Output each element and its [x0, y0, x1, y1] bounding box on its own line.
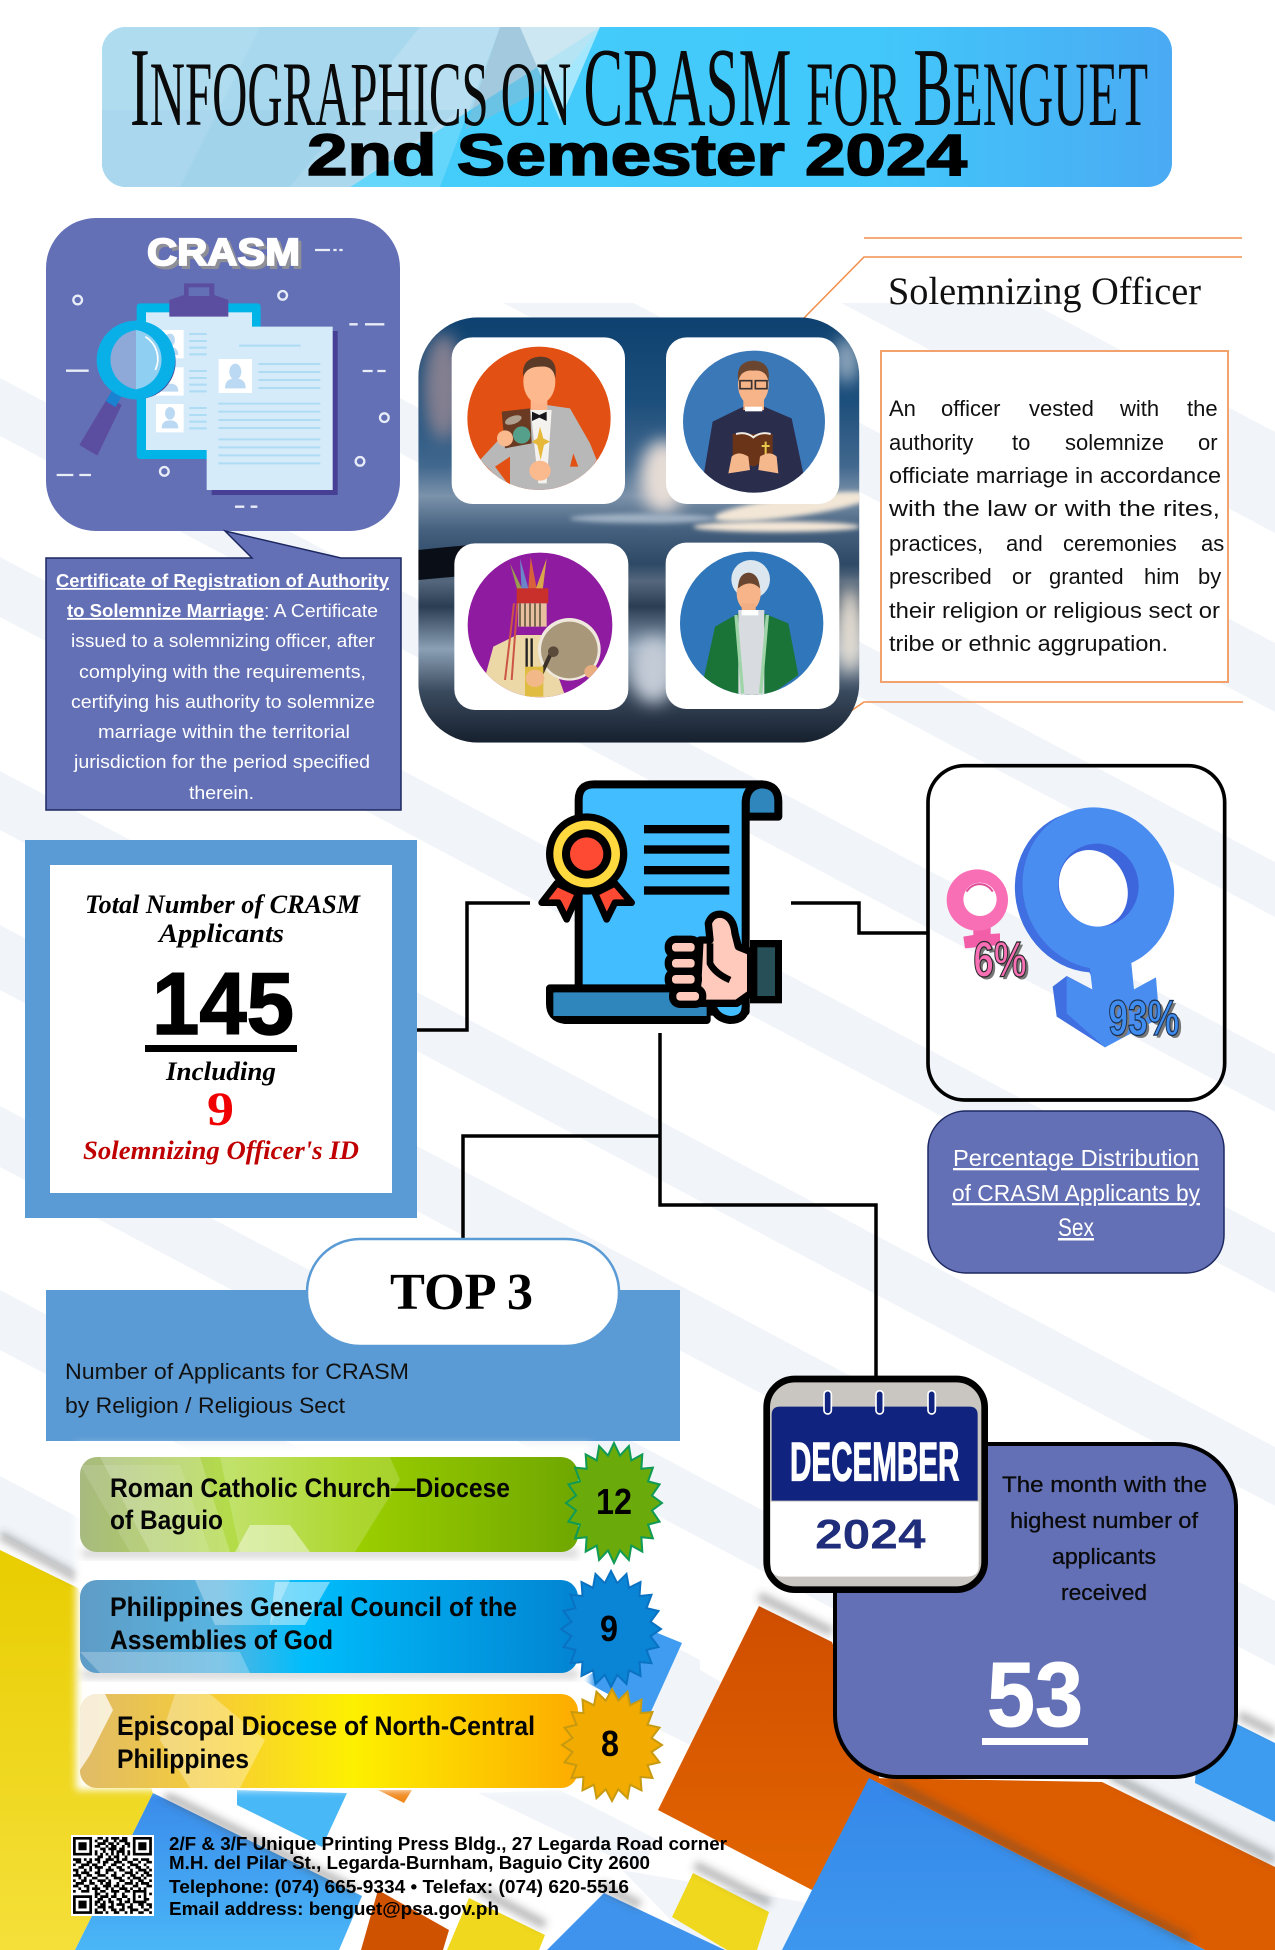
orange connector lines for solemnizing officer [803, 238, 1243, 737]
label: male percent: 93% [1111, 992, 1182, 1048]
panel: total applicants [25, 840, 417, 1218]
badge: count 8: 8 [601, 1723, 619, 1764]
callout: certificate definition: therein. [189, 783, 254, 803]
subtitle: 2nd Semester 2024 [307, 123, 967, 188]
text: month description: highest number of [1010, 1508, 1199, 1533]
total label: Applicants [157, 919, 284, 948]
callout: certificate definition: complying with the requirements, [79, 662, 366, 682]
text box: solemnizing officer definition: tribe or ethnic aggrupation. [889, 631, 1168, 656]
heading: Solemnizing Officer: Solemnizing Officer [888, 270, 1201, 313]
pill: TOP 3: TOP 3 [390, 1264, 533, 1321]
total label: Total Number of CRASM [85, 890, 361, 919]
text box: solemnizing officer definition: granted [1049, 564, 1124, 589]
glow behind ranking bars [76, 1445, 590, 1790]
panel: total applicants: Including [165, 1057, 276, 1086]
text: top 3 description [65, 1359, 409, 1418]
text: top 3 description: Number of Applicants for CRASM [65, 1359, 409, 1384]
panel: solemnizing officers photo [418, 317, 874, 743]
callout: certificate definition: issued to a solemnizing officer, after [71, 631, 375, 651]
text box: solemnizing officer definition [881, 351, 1228, 682]
footer: contact information [169, 1834, 727, 1919]
text box: solemnizing officer definition: him [1144, 564, 1179, 589]
bar: Episcopal Diocese: Philippines [117, 1744, 249, 1774]
label: CRASM: CRASM [150, 235, 303, 277]
footer: contact information: Email address: benguet@psa.gov.ph [169, 1899, 499, 1919]
card: indigenous leader with drum [454, 543, 628, 710]
bar: Episcopal Diocese [80, 1694, 578, 1788]
title banner [102, 26, 1172, 187]
text box: solemnizing officer definition: as [1201, 531, 1224, 556]
text box: solemnizing officer definition: prescribed [889, 564, 992, 589]
label: female percent: 6% [976, 934, 1029, 990]
bar: Roman Catholic Church [80, 1457, 578, 1558]
footer: contact information: Telephone: (074) 665-9334 • Telefax: (074) 620-5516 [169, 1877, 629, 1897]
card: imam in green robe [666, 543, 839, 709]
badge: count 9 [561, 1571, 661, 1687]
panel: total applicants: Solemnizing Officer's ID [83, 1136, 359, 1165]
badge: count 9: 9 [600, 1608, 618, 1649]
footer: contact information: 2/F & 3/F Unique Printing Press Bldg., 27 Legarda Road corner [169, 1834, 727, 1854]
bar: Philippines General Council: Assemblies of God [110, 1625, 333, 1655]
callout: certificate definition [46, 531, 401, 810]
total number 145: 145 [152, 954, 294, 1053]
text box: solemnizing officer definition: or [1012, 564, 1032, 589]
panel: percentage distribution caption: Percentage Distribution [953, 1145, 1199, 1171]
bar: Roman Catholic Church: Roman Catholic Church—Diocese [110, 1473, 510, 1503]
text: month description: received [1061, 1580, 1147, 1605]
text box: solemnizing officer definition: officiate marriage in accordance [889, 463, 1221, 488]
text box: solemnizing officer definition: and [1006, 531, 1043, 556]
calendar month: DECEMBER [790, 1431, 959, 1493]
label: male percent: 93% [1108, 990, 1179, 1046]
text box: solemnizing officer definition: An [889, 396, 916, 421]
icon: certificate scroll with medal and thumbs up [542, 784, 782, 1020]
panel: percentage distribution caption [928, 1111, 1224, 1273]
panel: percentage distribution caption: Sex [1058, 1214, 1094, 1242]
icon: December 2024 calendar [767, 1379, 985, 1590]
calendar year: 2024 [815, 1510, 926, 1557]
text box: solemnizing officer definition: to [1012, 430, 1030, 455]
text: month description [1002, 1472, 1207, 1605]
connector lines [417, 903, 928, 1380]
text box: solemnizing officer definition: officer [941, 396, 1001, 421]
solemnizing officer count: 9 [207, 1083, 234, 1136]
callout: certificate definition: : A Certificate [264, 601, 378, 621]
callout: certificate definition: marriage within the territorial [98, 722, 350, 742]
text box: solemnizing officer definition: with [1119, 396, 1159, 421]
icon: female symbol [947, 869, 1008, 948]
text box: solemnizing officer definition: their religion or religious sect or [889, 598, 1220, 623]
number 53: 53 [987, 1644, 1083, 1746]
pill: TOP 3 [307, 1239, 619, 1346]
badge: count 8 [562, 1689, 662, 1801]
text: month description: applicants [1052, 1544, 1156, 1569]
text box: solemnizing officer definition: authority [889, 430, 973, 455]
text box: solemnizing officer definition: the [1187, 396, 1218, 421]
text box: solemnizing officer definition: or [1198, 430, 1218, 455]
text box: solemnizing officer definition: by [1198, 564, 1221, 589]
badge: count 12: 12 [596, 1481, 632, 1522]
panel: gender chart [928, 766, 1225, 1100]
callout: certificate definition: jurisdiction for the period specified [73, 752, 370, 772]
callout: certificate definition: certifying his authority to solemnize [71, 692, 375, 712]
label: CRASM: CRASM [147, 232, 300, 274]
panel: highest month [835, 1444, 1236, 1777]
panel: CRASM illustration [46, 218, 400, 531]
bar: Roman Catholic Church: of Baguio [110, 1505, 223, 1535]
text box: solemnizing officer definition: practices, [889, 531, 983, 556]
label: female percent: 6% [973, 932, 1027, 988]
text: month description: The month with the [1002, 1472, 1207, 1497]
footer: QR code [71, 1835, 154, 1916]
text: top 3 description: by Religion / Religious Sect [65, 1393, 345, 1418]
text box: solemnizing officer definition: solemnize [1065, 430, 1164, 455]
text box: solemnizing officer definition: vested [1029, 396, 1094, 421]
bar: Philippines General Council [80, 1580, 578, 1679]
icon: male symbol [992, 786, 1197, 1047]
panel: top 3 heading band [46, 1239, 680, 1441]
total label [85, 890, 361, 948]
footer: contact information: M.H. del Pilar St., Legarda-Burnham, Baguio City 2600 [169, 1853, 650, 1873]
badge: count 12 [566, 1443, 662, 1563]
bar: Episcopal Diocese: Episcopal Diocese of North-Central [117, 1711, 535, 1741]
illustration: clipboard and magnifier [57, 250, 389, 507]
panel: percentage distribution caption: of CRASM Applicants by [952, 1180, 1200, 1206]
text box: solemnizing officer definition: with the law or with the rites, [888, 496, 1220, 521]
callout heading second line: to Solemnize Marriage [67, 601, 264, 621]
card: officiant in grey suit [452, 337, 625, 504]
text box: solemnizing officer definition: ceremonies [1063, 531, 1177, 556]
card: priest with bible [666, 337, 839, 504]
callout heading first line: Certificate of Registration of Authority [56, 571, 389, 591]
yellow shape, bottom left [0, 1550, 153, 1950]
bar: Philippines General Council: Philippines General Council of the [110, 1592, 517, 1622]
